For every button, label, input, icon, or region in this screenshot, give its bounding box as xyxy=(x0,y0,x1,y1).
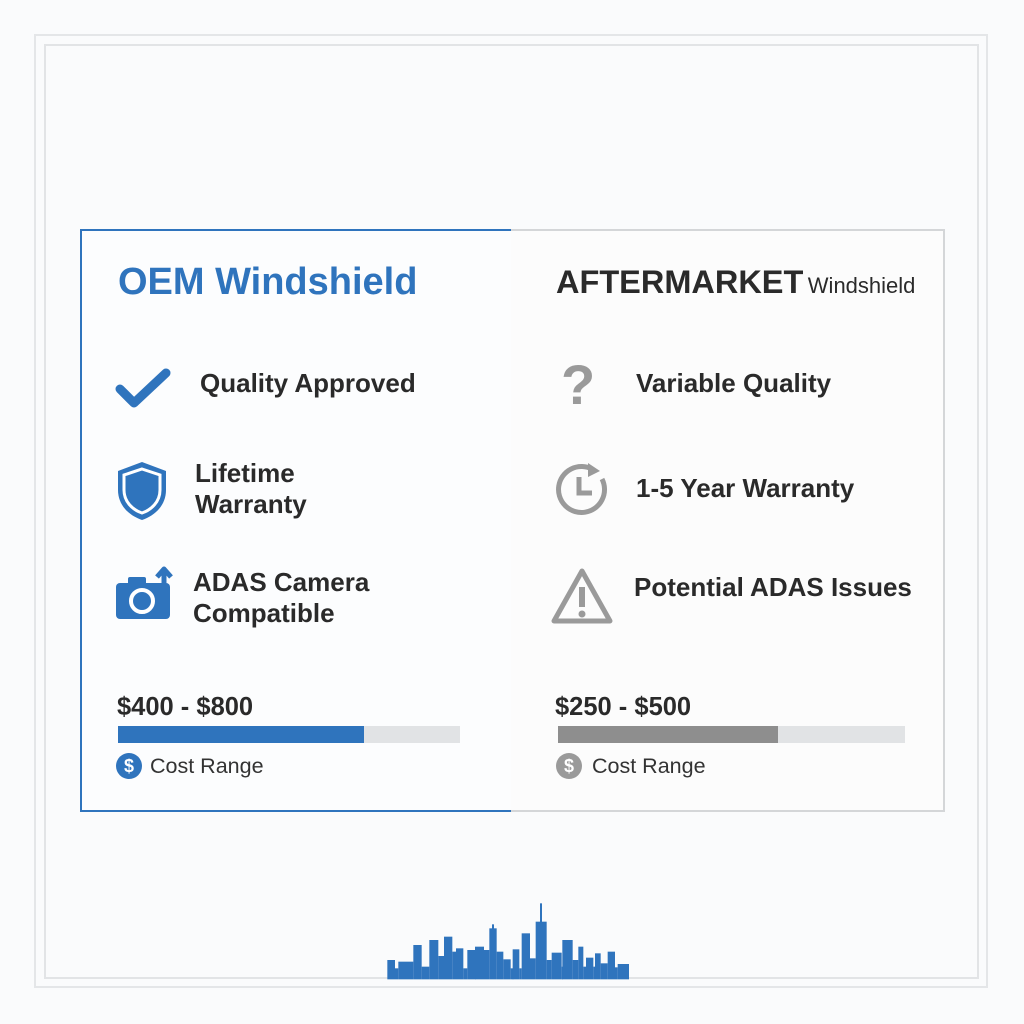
legend: OEM cost range: $ xyxy=(124,756,134,776)
text: adas compatible: ADAS Camera xyxy=(193,567,369,597)
bar: OEM cost xyxy=(118,726,460,743)
text: quality approved: Quality Approved xyxy=(200,368,416,398)
heading: OEM: OEM Windshield xyxy=(118,261,417,303)
icon: clock xyxy=(556,463,607,515)
icon: check xyxy=(116,368,170,408)
text: lifetime warranty: Lifetime xyxy=(195,458,295,488)
skyline xyxy=(387,903,629,980)
heading: aftermarket: AFTERMARKET Windshield xyxy=(556,264,915,300)
text: lifetime warranty: Warranty xyxy=(195,489,307,519)
legend: aftermarket cost range: $ xyxy=(564,756,574,776)
text: lifetime warranty xyxy=(195,458,307,519)
price: OEM: $400 - $800 xyxy=(117,693,253,721)
text: potential adas: Potential ADAS Issues xyxy=(634,572,912,602)
price: aftermarket: $250 - $500 xyxy=(555,693,691,721)
icon: question: ? xyxy=(561,353,595,416)
icon: camera xyxy=(116,566,173,619)
text: variable quality: Variable Quality xyxy=(636,368,831,398)
bar: aftermarket cost xyxy=(558,726,905,743)
text: adas compatible: Compatible xyxy=(193,598,335,628)
panel: OEM xyxy=(80,229,512,812)
icon: warning xyxy=(552,568,612,624)
icon: shield xyxy=(118,462,166,520)
panel: aftermarket xyxy=(511,229,945,812)
legend: aftermarket cost range: Cost Range xyxy=(592,754,706,778)
text: adas compatible xyxy=(193,567,370,628)
text: 1-5 year: 1-5 Year Warranty xyxy=(636,473,854,503)
legend: OEM cost range: Cost Range xyxy=(150,754,264,778)
